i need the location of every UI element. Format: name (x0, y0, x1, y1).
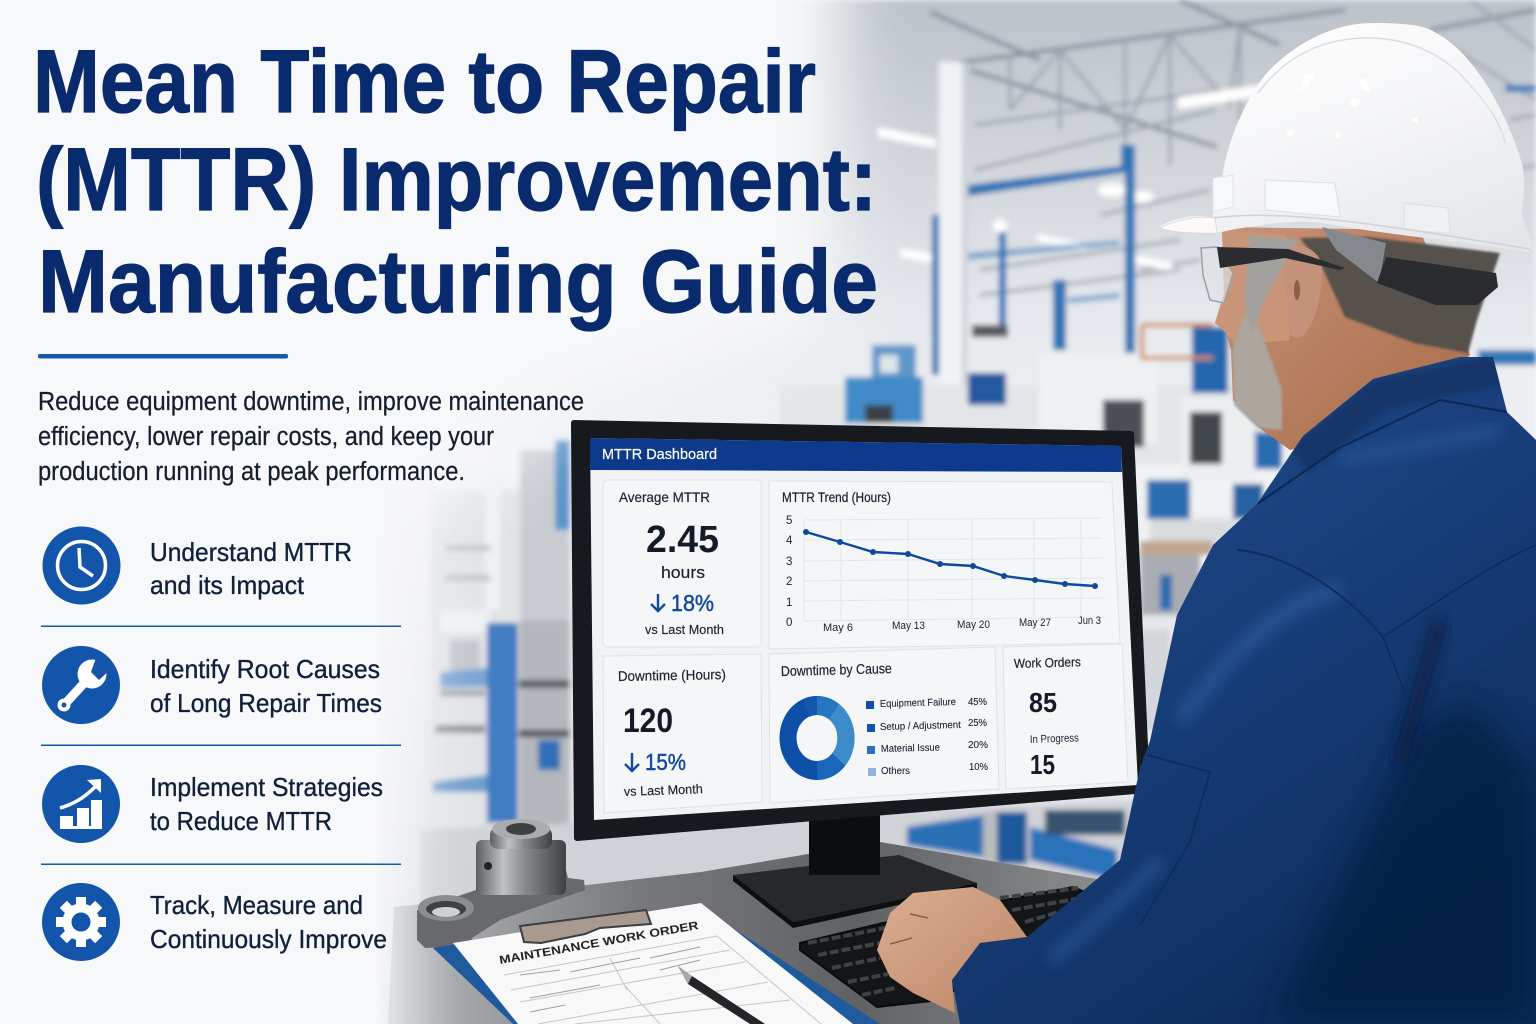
list item: identify root causes: Identify Root Causes (150, 654, 380, 684)
legend: Material Issue (881, 742, 940, 755)
floor (421, 800, 1133, 901)
icon: rising chart (42, 765, 120, 843)
card: downtime hours: 120 (623, 702, 673, 740)
card: downtime hours: 15% (645, 749, 686, 775)
card: MTTR trend line chart: 3 (786, 556, 792, 568)
card: MTTR trend line chart: May 6 (823, 622, 853, 634)
keyboard (800, 887, 1092, 1007)
card: downtime hours: vs Last Month (624, 781, 703, 799)
legend: Equipment Failure (880, 697, 956, 710)
list item: understand MTTR: and its Impact (150, 570, 305, 600)
card: MTTR trend line chart: 2 (786, 576, 792, 588)
clipboard with work order (433, 903, 880, 1024)
card: downtime hours (603, 654, 762, 813)
list item: identify root causes (42, 646, 382, 724)
card: average MTTR: vs Last Month (645, 622, 724, 637)
desk (388, 842, 1103, 1024)
worker (877, 23, 1536, 1024)
card: downtime hours: Downtime (Hours) (618, 666, 726, 684)
clipboard title: MAINTENANCE WORK ORDER (498, 920, 700, 967)
monitor stand (733, 815, 977, 928)
list item: track and improve: Continuously Improve (150, 924, 387, 954)
left shelving (436, 491, 520, 662)
legend: Others (881, 766, 910, 777)
card: average MTTR: hours (661, 564, 705, 582)
card: downtime by cause donut (769, 647, 999, 803)
card: average MTTR: Average MTTR (619, 489, 710, 505)
title (33, 31, 878, 331)
card: downtime by cause donut: Downtime by Cause (781, 660, 892, 679)
card: MTTR trend line chart (769, 481, 1120, 649)
trusses (930, 0, 1536, 147)
card: work orders: 15 (1030, 749, 1055, 780)
card: MTTR trend line chart: 5 (786, 515, 792, 527)
card: MTTR trend line chart: Jun 3 (1078, 615, 1101, 627)
dashboard screen (590, 438, 1138, 820)
list item: track and improve: Track, Measure and (150, 890, 363, 920)
list item: implement strategies: to Reduce MTTR (150, 806, 332, 836)
worker: finger lines (890, 914, 928, 944)
legend: 45% (968, 697, 987, 708)
pen (678, 966, 765, 1024)
card: MTTR trend line chart: May 27 (1019, 617, 1051, 629)
legend: 20% (968, 740, 988, 751)
card: average MTTR: 2.45 (646, 519, 719, 561)
list item: track and improve (42, 883, 387, 961)
legend: Setup / Adjustment (880, 720, 961, 733)
worker: jacket shading and seams (1050, 370, 1536, 1024)
card: MTTR trend line chart: MTTR Trend (Hours) (782, 490, 891, 505)
list item: understand MTTR: Understand MTTR (150, 537, 352, 567)
legend (866, 697, 988, 777)
worker: temple hair (1244, 235, 1300, 335)
card: average MTTR (603, 480, 761, 647)
card: work orders: 85 (1029, 687, 1057, 718)
worker: hand (877, 887, 1027, 1013)
title: (MTTR) Improvement: (36, 129, 877, 229)
monitor (574, 423, 1147, 838)
worker: ear (1284, 246, 1322, 338)
worker: hard hat strap (1322, 227, 1386, 283)
intro paragraph: efficiency, lower repair costs, and keep your (38, 423, 494, 451)
card: average MTTR: 18% (671, 590, 714, 616)
worker: beard (1232, 305, 1282, 430)
list item: understand MTTR (42, 526, 352, 604)
divider (41, 626, 401, 627)
ceiling lights (878, 84, 1265, 271)
divider (41, 864, 401, 865)
dashboard header: MTTR Dashboard (602, 447, 717, 463)
icon: gear (42, 883, 120, 961)
worker: hair (1300, 237, 1500, 353)
machines (782, 388, 1232, 464)
blue carts (907, 815, 983, 857)
card: MTTR trend line chart: May 20 (957, 619, 990, 631)
metal flange part (417, 819, 585, 948)
card: MTTR trend line chart: 0 (786, 617, 792, 629)
icon: wrench (42, 646, 120, 724)
blue structure (932, 145, 1135, 375)
worker: safety glasses (1201, 247, 1345, 303)
card: MTTR trend line chart: May 13 (892, 620, 925, 632)
legend: 25% (968, 718, 987, 729)
card: work orders (1003, 644, 1128, 789)
dashboard header (590, 438, 1122, 472)
intro paragraph (38, 388, 584, 486)
title underline (38, 354, 288, 358)
list item: identify root causes: of Long Repair Times (150, 688, 382, 718)
worker: jacket (952, 357, 1536, 1024)
divider (41, 744, 401, 746)
background: factory scene (380, 0, 1536, 1024)
title: Mean Time to Repair (33, 31, 816, 131)
list item: implement strategies: Implement Strategies (150, 772, 383, 802)
card: MTTR trend line chart: 1 (786, 597, 792, 609)
card: MTTR trend line chart: 4 (786, 535, 793, 547)
donut chart (788, 696, 855, 780)
form field scribbles (520, 947, 700, 1012)
legend: 10% (969, 762, 988, 773)
card: work orders: In Progress (1030, 732, 1080, 746)
intro paragraph: Reduce equipment downtime, improve maintenance (38, 388, 584, 416)
icon: clock (42, 526, 120, 604)
intro paragraph: production running at peak performance. (38, 458, 465, 486)
worker: neck and face (1215, 227, 1470, 450)
worker: hard hat (1159, 23, 1532, 252)
title: Manufacturing Guide (38, 231, 878, 331)
list item: implement strategies (42, 765, 383, 843)
card: work orders: Work Orders (1014, 654, 1082, 671)
hat highlights (1286, 72, 1418, 138)
